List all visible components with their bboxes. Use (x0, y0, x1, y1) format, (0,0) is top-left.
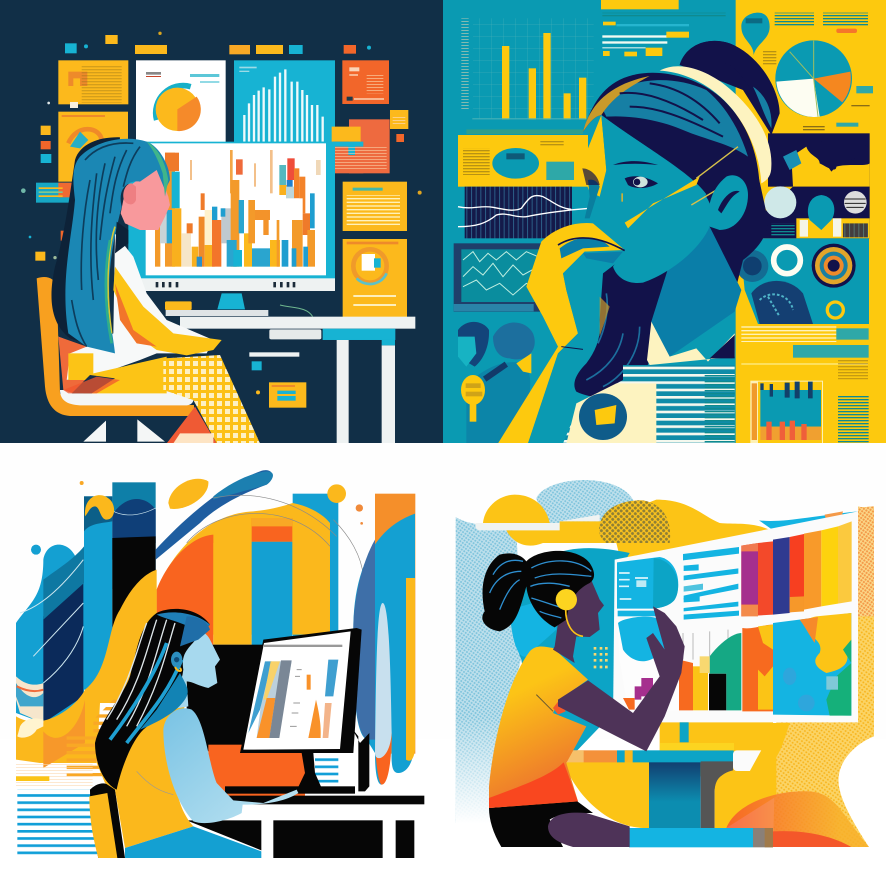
small bar chart card (750, 381, 823, 443)
arc of columns (157, 484, 363, 646)
woman: legs (489, 801, 630, 847)
desk and keyboard (165, 301, 415, 443)
bar chart: top left (461, 18, 594, 134)
decorative dots (31, 481, 363, 555)
woman: torso and chair (89, 700, 261, 858)
panel: white abstract illustration (0, 443, 443, 858)
woman: headband (660, 66, 771, 183)
woman: face (582, 115, 738, 283)
woman: top hair (583, 41, 774, 200)
woman: yellow forehead sliver (582, 115, 606, 197)
woman: ear (709, 175, 748, 230)
column: tall blue (84, 482, 156, 690)
woman: neck and face (553, 576, 604, 663)
yellow info card with ellipse (458, 135, 588, 187)
blue card with text rows (617, 557, 678, 616)
teal circles and rings panel (736, 238, 869, 324)
desk (187, 786, 424, 858)
woman: arm and hand (558, 606, 685, 751)
monitor (128, 142, 335, 309)
woman: legs with pattern (163, 355, 260, 443)
bar chart on monitor (155, 150, 321, 267)
woman: lower hair strands (586, 293, 640, 387)
top stat list (601, 0, 726, 56)
woman: hair bun (680, 41, 780, 135)
chair (37, 277, 194, 442)
woman: arm (163, 708, 298, 823)
stat rows bottom right (741, 326, 869, 379)
report card: donut chart (343, 239, 407, 317)
woman: long blue hair (65, 139, 170, 353)
people group bottom left (458, 322, 535, 443)
floating colour tiles (21, 32, 422, 394)
desk block (564, 723, 869, 847)
world map panel (768, 133, 870, 187)
report card: yellow text right (343, 182, 407, 231)
report card: yellow left behind hair (58, 112, 128, 182)
woman: torso and shirt (58, 233, 222, 393)
report card: pie chart (136, 60, 226, 142)
stripes left bottom (16, 696, 117, 858)
side spark rows (838, 395, 869, 443)
panel: teal and yellow woman portrait (443, 0, 886, 443)
woman: hand and arm (498, 223, 625, 443)
small tag card bottom (269, 382, 306, 408)
woman: hair (95, 609, 210, 795)
report card: yellow top left (58, 60, 128, 108)
headphone (556, 589, 583, 636)
keypad dots (594, 647, 608, 668)
woman: back hair (574, 167, 768, 398)
yellow wave behind woman (16, 570, 213, 768)
orange and blue right columns (353, 494, 415, 785)
chart: lower mixed columns (617, 617, 773, 711)
map panel (773, 613, 851, 716)
woman: dark hair back (51, 137, 120, 353)
woman: inner ear (718, 191, 740, 213)
data table with rows (683, 547, 739, 620)
panel: dark dashboard illustration (0, 0, 443, 443)
black backdrop and orange desk block (187, 645, 338, 798)
woman: ear (123, 183, 136, 204)
woman: neck (651, 227, 741, 357)
monitor (613, 511, 858, 742)
yellow right column (736, 0, 886, 443)
yellow oval and sweep (156, 470, 273, 560)
column: dark blue (20, 546, 84, 723)
collar and shirt (563, 322, 735, 443)
panel: white dashboard illustration with yellow shirt (443, 443, 886, 847)
column: blue wavy left (16, 545, 84, 723)
pie chart with callouts (741, 13, 873, 131)
monitor with waveform (454, 243, 544, 312)
woman: neck and face (170, 627, 220, 710)
woman: shirt (489, 647, 588, 808)
woman: face (121, 167, 170, 230)
mixed infographic panel (763, 186, 870, 238)
monitor (240, 628, 369, 791)
dark line chart (458, 187, 590, 238)
small tag card left (36, 183, 72, 203)
colour columns (741, 521, 852, 616)
small stacked cards right (332, 110, 408, 173)
bar chart card: cyan (234, 60, 335, 174)
background halftone shapes (456, 480, 874, 847)
woman: hair (482, 551, 594, 631)
report card: orange (342, 60, 389, 104)
